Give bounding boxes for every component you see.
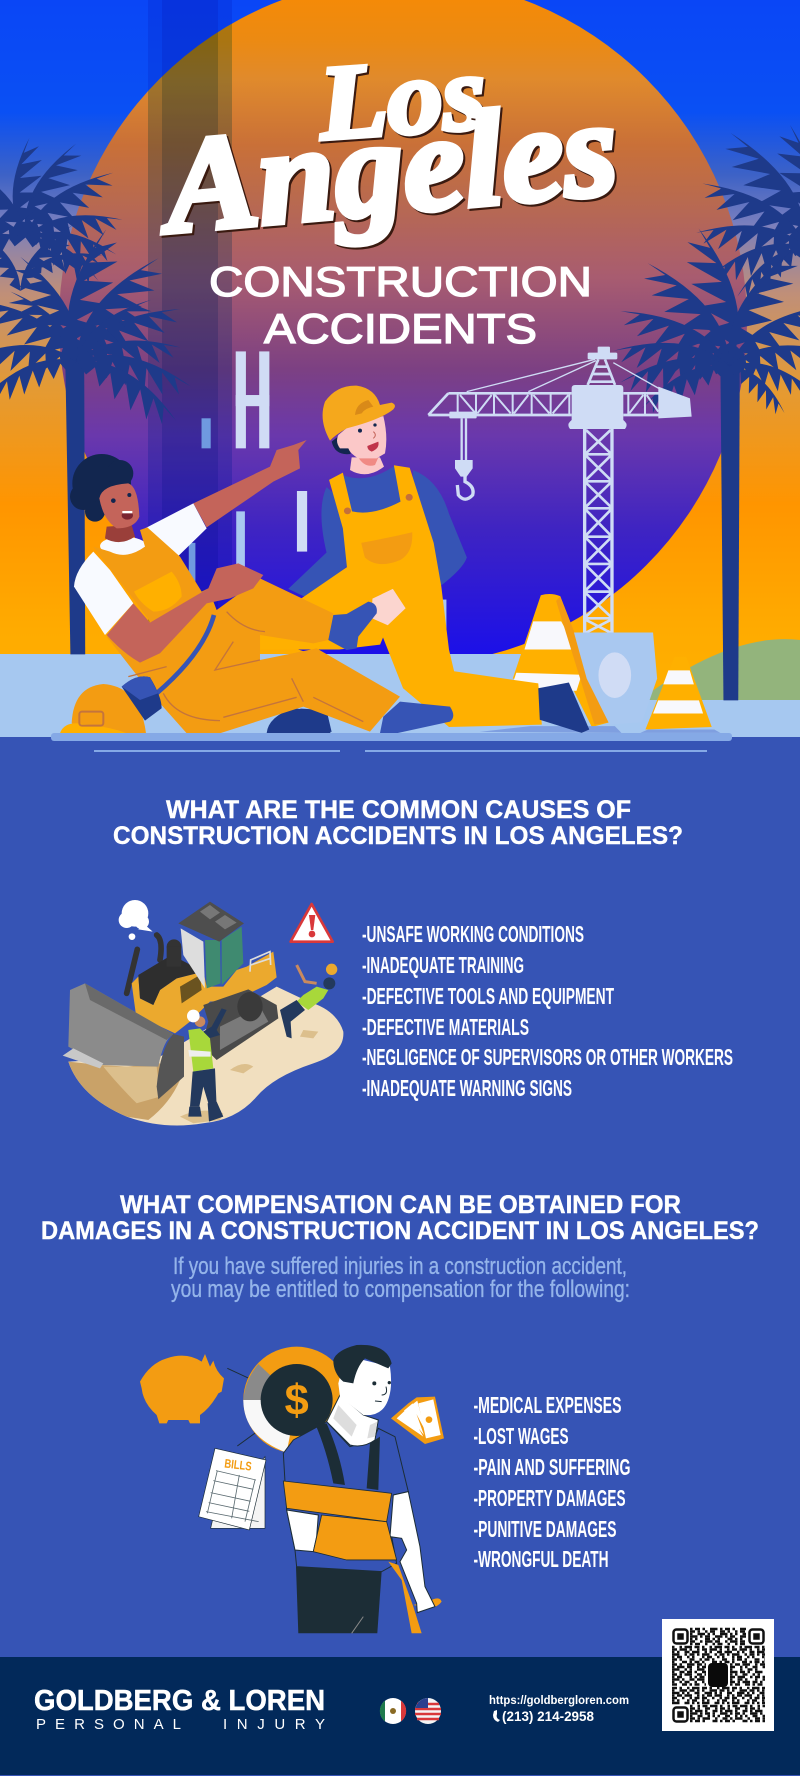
heading: causes bbox=[113, 796, 683, 850]
word: Los: Los bbox=[316, 36, 491, 164]
lower body bbox=[260, 465, 589, 733]
ground strip right bbox=[640, 700, 800, 737]
list: causes: -DEFECTIVE MATERIALS bbox=[362, 1014, 529, 1040]
shirt sleeves and collar bbox=[74, 503, 207, 635]
footer contact: https://goldbergloren.com bbox=[489, 1693, 629, 1707]
title: Los Angeles bbox=[151, 34, 625, 265]
bucket bbox=[574, 633, 657, 725]
hook bbox=[455, 418, 473, 499]
trousers bbox=[296, 1567, 382, 1633]
rear boot bbox=[268, 709, 332, 732]
translucent tower bbox=[148, 0, 232, 737]
heading: compensation: WHAT COMPENSATION CAN BE OBTAINED FOR bbox=[120, 1191, 681, 1219]
heading: compensation bbox=[41, 1191, 759, 1245]
shirt chest bbox=[343, 465, 408, 519]
engine housing bbox=[138, 955, 203, 1005]
mouth bbox=[367, 442, 379, 452]
QR centre logo bbox=[708, 1663, 728, 1687]
crutch bbox=[388, 1562, 442, 1633]
footer contact bbox=[489, 1693, 629, 1724]
list: causes: -INADEQUATE TRAINING bbox=[362, 952, 524, 978]
dark sand pile bbox=[68, 1062, 180, 1120]
QR code bbox=[662, 1619, 774, 1731]
overall pocket bbox=[361, 532, 412, 564]
list: causes: -UNSAFE WORKING CONDITIONS bbox=[362, 921, 584, 947]
front boot bbox=[538, 682, 589, 733]
crane jib lattice bbox=[428, 393, 660, 415]
heading: causes: CONSTRUCTION ACCIDENTS IN LOS ANGELES? bbox=[113, 822, 683, 850]
crane cab bbox=[568, 385, 627, 429]
hard hat bbox=[323, 386, 395, 441]
injured arm bbox=[107, 563, 263, 663]
palm tree right bbox=[610, 226, 800, 700]
raised boot bbox=[328, 602, 377, 650]
worker: injured seated man bbox=[60, 440, 453, 733]
neck shadow bbox=[358, 457, 378, 466]
right hill bbox=[640, 639, 800, 700]
sun disc bbox=[59, 0, 747, 666]
list: compensation: -WRONGFUL DEATH bbox=[474, 1546, 608, 1572]
subtitle: ACCIDENTS bbox=[264, 305, 537, 352]
large cone bbox=[513, 594, 610, 727]
trunk bbox=[65, 361, 85, 654]
list: compensation: -PUNITIVE DAMAGES bbox=[474, 1516, 616, 1542]
jib block bbox=[449, 412, 477, 418]
list: causes: -DEFECTIVE TOOLS AND EQUIPMENT bbox=[362, 983, 614, 1009]
counterweight bbox=[658, 387, 692, 418]
background building pieces bbox=[189, 351, 446, 646]
neck brace bbox=[327, 1395, 378, 1446]
footer logo: PERSONAL bbox=[36, 1716, 181, 1733]
platform lines bbox=[94, 750, 707, 752]
list: compensation bbox=[474, 1392, 630, 1572]
footer logo bbox=[34, 1685, 325, 1733]
crawler track bbox=[202, 989, 278, 1060]
compensation intro text bbox=[171, 1253, 630, 1303]
shoulder straps bbox=[315, 1423, 380, 1490]
standing worker bbox=[187, 1008, 227, 1122]
subtitle bbox=[209, 258, 592, 352]
arm sling bbox=[283, 1481, 397, 1560]
ground bbox=[0, 654, 640, 737]
crane mast bbox=[585, 428, 612, 633]
dollar sign: $ bbox=[285, 1377, 309, 1425]
exhaust pipes bbox=[127, 935, 166, 997]
word: Angeles: Angeles bbox=[151, 73, 623, 263]
overalls bbox=[93, 527, 400, 733]
machine body bbox=[132, 952, 277, 1033]
word: Angeles: Angeles bbox=[153, 75, 625, 265]
subtitle: CONSTRUCTION bbox=[209, 258, 592, 305]
sky gradient bbox=[0, 0, 800, 700]
vent bbox=[180, 975, 202, 1003]
rear boot bbox=[267, 708, 331, 733]
hair bbox=[70, 454, 133, 522]
piggy bank bbox=[140, 1354, 224, 1423]
sand patch bbox=[68, 987, 343, 1126]
face bbox=[99, 483, 139, 528]
cash fan bbox=[391, 1397, 444, 1444]
ground hard hat bbox=[60, 684, 146, 733]
face bbox=[338, 1360, 391, 1415]
heading: compensation: DAMAGES IN A CONSTRUCTION ACCIDENT IN LOS ANGELES? bbox=[41, 1217, 759, 1245]
pouch bbox=[122, 676, 162, 721]
palm tree back left bbox=[0, 136, 125, 300]
small cone bbox=[645, 657, 712, 729]
hair bbox=[333, 1345, 392, 1383]
smoke bbox=[119, 900, 153, 940]
bills paper: BILLS bbox=[224, 1456, 252, 1474]
phone icon bbox=[493, 1710, 500, 1722]
QR finder patterns bbox=[674, 1630, 764, 1722]
cab bbox=[178, 902, 244, 988]
flag: USA bbox=[415, 1698, 441, 1724]
arms bbox=[287, 1492, 435, 1613]
bib pocket bbox=[134, 572, 182, 612]
illustration: bulldozer accident bbox=[63, 900, 343, 1126]
list: compensation: -LOST WAGES bbox=[474, 1423, 568, 1449]
QR modules bbox=[672, 1629, 765, 1721]
falling worker bbox=[280, 964, 337, 1038]
man torso bbox=[283, 1422, 408, 1572]
list: causes: -INADEQUATE WARNING SIGNS bbox=[362, 1075, 572, 1101]
list: compensation: -PAIN AND SUFFERING bbox=[474, 1454, 630, 1480]
worker: kneeling man bbox=[260, 386, 589, 733]
list: compensation: -PROPERTY DAMAGES bbox=[474, 1485, 626, 1511]
face bbox=[337, 416, 386, 458]
hero: sunset scene bbox=[0, 0, 800, 752]
compensation intro text: you may be entitled to compensation for the following: bbox=[171, 1276, 630, 1303]
word: Los: Los bbox=[314, 34, 489, 162]
crane ties bbox=[467, 359, 662, 392]
footer logo: INJURY bbox=[223, 1716, 325, 1733]
railing bbox=[250, 952, 271, 972]
platform edge bbox=[51, 733, 732, 741]
neck bbox=[105, 525, 135, 542]
palm tree back right bbox=[693, 121, 800, 304]
heading: causes: WHAT ARE THE COMMON CAUSES OF bbox=[166, 796, 631, 824]
cone bases bbox=[480, 726, 720, 733]
connector lines bbox=[227, 1368, 262, 1446]
head bbox=[323, 386, 395, 474]
coin bbox=[261, 1364, 333, 1436]
tower crane bbox=[428, 347, 692, 633]
overalls bbox=[301, 465, 542, 727]
warning sign bbox=[291, 904, 333, 942]
hand bbox=[371, 589, 406, 625]
fold lines bbox=[128, 612, 363, 722]
strap bbox=[157, 615, 214, 693]
arms bbox=[397, 470, 467, 608]
flag: Mexico bbox=[380, 1698, 406, 1724]
bills paper bbox=[199, 1448, 266, 1530]
footer contact: (213) 214-2958 bbox=[502, 1708, 594, 1724]
list: causes bbox=[362, 921, 733, 1101]
illustration: injured man with expenses bbox=[140, 1345, 444, 1633]
lower boot bbox=[380, 702, 453, 733]
road cones and bucket bbox=[480, 594, 720, 733]
crane top bbox=[588, 347, 617, 385]
footer band bbox=[0, 1657, 800, 1775]
raised arm bbox=[193, 440, 307, 527]
blade bbox=[63, 983, 184, 1099]
ring chart bbox=[243, 1347, 350, 1453]
footer logo: GOLDBERG & LOREN bbox=[34, 1685, 325, 1717]
neck bbox=[350, 457, 384, 474]
list: compensation: -MEDICAL EXPENSES bbox=[474, 1392, 622, 1418]
palm tree left bbox=[0, 227, 193, 654]
hair bbox=[332, 428, 351, 454]
compensation intro text: If you have suffered injuries in a construction accident, bbox=[173, 1253, 627, 1280]
trunk bbox=[720, 366, 740, 700]
